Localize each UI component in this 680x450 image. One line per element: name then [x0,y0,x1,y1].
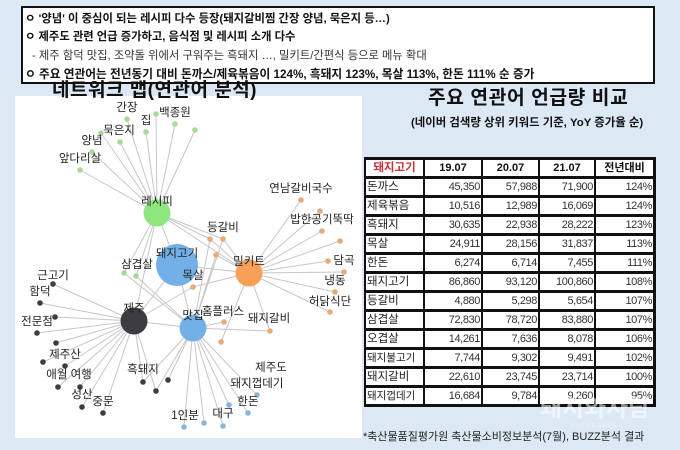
table: keyword mention volumes: 14,261 [449,333,480,345]
panel: network map: 레시피 [141,195,173,208]
table: keyword mention volumes: 9,784 [511,390,537,402]
table: keyword mention volumes: 124% [625,181,652,193]
panel: network map: 성산 [71,388,93,401]
watermark: PIGPEOPLE [572,423,618,429]
panel: network map: 함덕 [29,285,51,298]
panel: key findings box: ㅇ '양념' 이 중심이 되는 레시피 다수 등장(돼지갈비찜 간장 양념, 묵은지 등…) [25,13,390,25]
panel: network map: 냉동 [324,274,346,287]
table: keyword mention volumes: 전년대비 [604,162,645,174]
table: keyword mention volumes: 등갈비 [367,295,399,307]
table: keyword mention volumes: 5,298 [511,295,537,307]
table: keyword mention volumes: 57,988 [506,181,537,193]
table: keyword mention volumes: 8,078 [567,333,593,345]
table: keyword mention volumes: 106% [625,333,652,345]
panel: network map: 대구 [212,407,234,420]
panel: network map: 양념 [81,134,103,147]
panel: network map [15,96,362,438]
table: keyword mention volumes: 돼지불고기 [367,352,415,364]
panel: network map: 돼지갈비 [248,311,290,325]
panel: network map: 삼겹살 [121,258,153,271]
panel: network map: 앞다리살 [59,152,102,165]
panel: network map: 맛집 [182,309,204,322]
panel: network map: 밀키트 [233,255,265,268]
table: keyword mention volumes: 24,911 [450,238,480,250]
panel: network map: 돼지껍데기 [231,377,283,390]
table: keyword mention volumes: 9,491 [567,352,593,364]
table: keyword mention volumes: 28,156 [506,238,537,250]
table: keyword mention volumes: 7,636 [511,333,537,345]
table: keyword mention volumes: 흑돼지 [367,219,399,231]
table: keyword mention volumes: 6,714 [511,257,537,269]
table: keyword mention volumes: 19.07 [439,162,467,174]
panel: network map: 중문 [92,396,114,408]
table: keyword mention volumes: 107% [625,314,652,326]
panel: network map: 허닭식단 [309,294,352,308]
table: keyword mention volumes: 9,260 [567,390,593,402]
table: keyword mention volumes: 7,744 [454,352,480,364]
table: keyword mention volumes: 108% [625,276,652,288]
heading: network map: 네트워크 맵(연관어 분석) [52,80,257,101]
table: keyword mention volumes: 6,274 [454,257,480,269]
table: keyword mention volumes: 107% [625,295,652,307]
table: keyword mention volumes: 돼지갈비 [367,371,409,383]
watermark: 돼지와사람 [540,395,650,422]
table: keyword mention volumes: 30,635 [449,219,480,231]
table: keyword mention volumes: 100% [625,371,652,383]
table: keyword mention volumes: 31,837 [562,238,593,250]
panel: network map: 제주도 [255,361,287,374]
table: keyword mention volumes: 16,684 [449,390,480,402]
panel: network map: 애월 여행 [46,368,92,381]
table: keyword mention volumes: 4,880 [454,295,480,307]
table: keyword mention volumes: 돼지고기 [367,276,409,288]
panel: network map: 밥한공기뚝딱 [290,213,354,226]
panel: network map: 제주 [123,302,145,315]
table: keyword mention volumes: 7,455 [567,257,593,269]
heading: keyword comparison: 주요 연관어 언급량 비교 [428,88,628,109]
table: keyword mention volumes: 돼지껍데기 [367,390,415,402]
panel: network map: 목살 [182,269,204,282]
panel: network map: 집 [141,114,151,127]
table: keyword mention volumes: 오겹살 [367,333,399,345]
panel: network map: 간장 [116,101,138,114]
table: keyword mention volumes: 9,302 [511,352,537,364]
table: keyword mention volumes: 111% [627,257,652,269]
table: keyword mention volumes: 113% [626,238,652,250]
panel: network map: 백종원 [159,105,191,119]
panel: key findings box [21,6,655,84]
table: keyword mention volumes: 22,938 [506,219,537,231]
table: keyword mention volumes: 21.07 [553,162,581,174]
panel: key findings box: ㅇ 제주도 관련 언급 증가하고, 음식점 및 레시피 소개 다수 [25,31,295,43]
table: keyword mention volumes: 83,880 [562,314,593,326]
table: keyword mention volumes: 95% [631,390,652,402]
panel: network map: 근고기 [37,269,69,282]
panel: network map: 한돈 [237,395,259,408]
panel: key findings box: ㅇ 주요 연관어는 전년동기 대비 돈까스/제육볶음이 124%, 흑돼지 123%, 목살 113%, 한돈 111% 순 증가 [25,68,534,81]
panel: network map: 등갈비 [207,220,239,234]
table: keyword mention volumes: 5,654 [567,295,593,307]
table: keyword mention volumes: 12,989 [506,200,537,212]
panel: network map: 담곡 [333,254,355,267]
table: keyword mention volumes: 돼지고기 [373,162,416,174]
panel: network map: 묵은지 [103,124,135,137]
table: keyword mention volumes: 16,069 [562,200,593,212]
table: keyword mention volumes: 목살 [367,238,388,250]
table: keyword mention volumes: 23,745 [506,371,537,383]
table: keyword mention volumes: 93,120 [506,276,537,288]
table: keyword mention volumes: 100,860 [556,276,593,288]
table: keyword mention volumes: 86,860 [449,276,480,288]
panel: network map: 흑돼지 [127,362,159,376]
panel: network map: 홈플러스 [202,304,244,318]
source note: *축산물품질평가원 축산물소비정보분석(7월), BUZZ분석 결과 [363,431,644,443]
table: keyword mention volumes: 123% [625,219,652,231]
table: keyword mention volumes: 20.07 [497,162,524,174]
panel: network map: 제주산 [49,348,81,361]
table: keyword mention volumes: 한돈 [367,257,388,269]
table: keyword mention volumes: 10,516 [449,200,480,212]
panel: network map: 전문점 [21,315,53,328]
table: keyword mention volumes: 72,830 [449,314,480,326]
table: keyword mention volumes: 102% [625,352,652,364]
table: keyword mention volumes: 45,350 [449,181,480,193]
table: keyword mention volumes: 23,714 [562,371,593,383]
table: keyword mention volumes: 71,900 [562,181,593,193]
subheading: comparison basis: (네이버 검색량 상위 키워드 기준, YoY 증가율 순) [411,117,643,129]
table: keyword mention volumes: 78,720 [506,314,537,326]
table: keyword mention volumes: 28,222 [562,219,593,231]
panel: network map: 연남갈비국수 [269,181,333,195]
panel: key findings box: - 제주 함덕 맛집, 조약돌 위에서 구워주는 흑돼지 …, 밀키트/간편식 등으로 메뉴 확대 [32,50,427,62]
panel: network map: 1인분 [171,409,199,422]
table: keyword mention volumes: 22,610 [449,371,480,383]
table: keyword mention volumes: 124% [625,200,652,212]
table: keyword mention volumes: 돈까스 [367,181,399,193]
table: keyword mention volumes [364,157,656,407]
panel: network map: 돼지고기 [156,247,198,260]
table: keyword mention volumes: 삼겹살 [367,314,399,326]
table: keyword mention volumes: 제육볶음 [367,200,409,212]
